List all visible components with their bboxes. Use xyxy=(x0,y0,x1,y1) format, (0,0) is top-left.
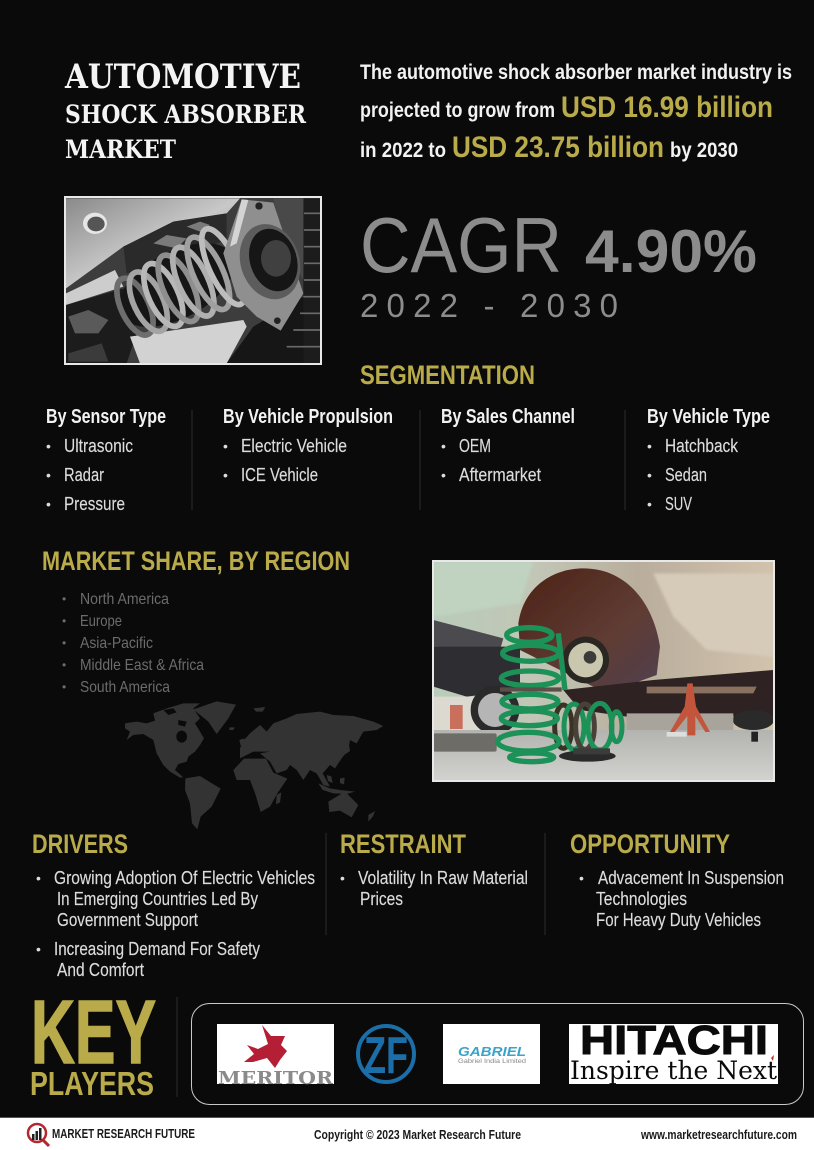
panel: opportunity: Technologies xyxy=(596,889,687,909)
CAGR: 4.90% xyxy=(585,218,757,285)
panel: restraint: Prices xyxy=(360,889,403,909)
logo: Hitachi xyxy=(569,1017,778,1085)
panel: key player logos xyxy=(192,1004,804,1104)
market summary text: projected to grow from xyxy=(360,99,555,122)
CAGR: CAGR xyxy=(360,201,562,289)
panel: opportunity: OPPORTUNITY xyxy=(570,829,730,859)
panel: by sensor type: Radar xyxy=(64,465,104,485)
market summary text: USD 23.75 billion xyxy=(452,131,664,164)
coil spring xyxy=(124,244,231,327)
market summary text xyxy=(360,61,792,164)
panel: by vehicle type xyxy=(647,406,770,514)
icon: market research future logo xyxy=(28,1124,49,1146)
panel: drivers xyxy=(32,829,315,980)
heading: key players: KEY xyxy=(31,983,156,1083)
wheel hub xyxy=(562,637,609,683)
logo: Gabriel: GABRIEL xyxy=(458,1044,526,1059)
panel: by vehicle type: By Vehicle Type xyxy=(647,406,770,428)
panel: by sensor type: Ultrasonic xyxy=(64,436,133,456)
region list: Middle East & Africa xyxy=(80,657,204,674)
panel: by sales channel: • xyxy=(441,438,446,454)
heading: market share by region: MARKET SHARE, BY REGION xyxy=(42,546,350,576)
logo: Hitachi: HITACHI xyxy=(580,1017,768,1063)
panel: opportunity: Advacement In Suspension xyxy=(598,868,784,888)
market summary text: USD 16.99 billion xyxy=(561,91,773,124)
region list: • xyxy=(62,614,66,628)
region list: North America xyxy=(80,591,169,608)
photo: shock absorber xyxy=(64,196,322,367)
region list xyxy=(62,591,204,696)
panel: by sales channel: Aftermarket xyxy=(459,465,541,485)
CAGR: 2022 - 2030 xyxy=(360,287,618,324)
region list: Asia-Pacific xyxy=(80,635,153,652)
region list: South America xyxy=(80,679,170,696)
logo: Meritor xyxy=(217,1024,334,1089)
panel: by vehicle propulsion: By Vehicle Propulsion xyxy=(223,406,393,428)
logo: Hitachi: Inspire the Next xyxy=(570,1056,777,1085)
world map xyxy=(125,701,383,829)
region list: Europe xyxy=(80,613,122,630)
panel: by vehicle propulsion: • xyxy=(223,467,228,483)
region list: • xyxy=(62,680,66,694)
panel: drivers: • xyxy=(36,941,41,957)
panel: by sales channel: OEM xyxy=(459,436,491,456)
panel: drivers: Government Support xyxy=(57,910,198,930)
panel: drivers: And Comfort xyxy=(57,960,144,980)
panel: restraint: Volatility In Raw Material xyxy=(358,868,528,888)
panel: by sales channel: By Sales Channel xyxy=(441,406,575,428)
jack stand xyxy=(670,683,710,735)
title xyxy=(64,57,306,164)
panel: by vehicle type: Hatchback xyxy=(665,436,739,456)
logo: Meritor: MERITOR xyxy=(218,1068,334,1089)
large spring xyxy=(498,628,565,762)
panel: by vehicle type: • xyxy=(647,496,652,512)
panel: by vehicle type: SUV xyxy=(665,494,692,514)
region list: • xyxy=(62,636,66,650)
panel: by sensor type: • xyxy=(46,438,51,454)
panel: by vehicle type: Sedan xyxy=(665,465,707,485)
panel: by sensor type: Pressure xyxy=(64,494,125,514)
panel: drivers: Growing Adoption Of Electric Vehicles xyxy=(54,868,315,888)
photo: car suspension springs xyxy=(432,560,775,783)
region list: • xyxy=(62,592,66,606)
footer xyxy=(0,1117,814,1150)
market summary text: in 2022 to xyxy=(360,139,446,162)
panel: by vehicle type: • xyxy=(647,467,652,483)
panel: drivers: In Emerging Countries Led By xyxy=(57,889,258,909)
footer: Copyright © 2023 Market Research Future xyxy=(314,1127,521,1142)
panel: by sensor type: By Sensor Type xyxy=(46,406,166,428)
title: AUTOMOTIVE xyxy=(64,57,301,97)
panel: by vehicle propulsion: Electric Vehicle xyxy=(241,436,347,456)
footer: MARKET RESEARCH FUTURE xyxy=(52,1126,195,1141)
panel: restraint: • xyxy=(340,870,345,886)
panel: drivers: DRIVERS xyxy=(32,829,128,859)
panel: drivers: • xyxy=(36,870,41,886)
heading: key players xyxy=(30,983,156,1102)
panel: opportunity: • xyxy=(579,870,584,886)
mounting plate xyxy=(223,199,303,331)
logo: ZF: ZF xyxy=(364,1027,408,1085)
panel: by vehicle propulsion xyxy=(223,406,393,485)
panel: opportunity: For Heavy Duty Vehicles xyxy=(596,910,761,930)
heading: key players: PLAYERS xyxy=(30,1065,154,1102)
panel: restraint: RESTRAINT xyxy=(340,829,466,859)
panel: by vehicle type: • xyxy=(647,438,652,454)
small spring xyxy=(555,703,622,750)
logo: Gabriel xyxy=(443,1024,540,1084)
CAGR xyxy=(360,201,757,324)
panel: by vehicle propulsion: • xyxy=(223,438,228,454)
title: MARKET xyxy=(65,135,176,164)
logo: Gabriel: Gabriel India Limited xyxy=(458,1058,526,1065)
panel: by sales channel xyxy=(441,406,575,485)
region list: • xyxy=(62,658,66,672)
panel: by sensor type: • xyxy=(46,496,51,512)
panel: opportunity xyxy=(570,829,784,930)
panel: by sales channel: • xyxy=(441,467,446,483)
panel: by sensor type xyxy=(46,406,166,514)
heading: segmentation: SEGMENTATION xyxy=(360,360,535,390)
panel: by sensor type: • xyxy=(46,467,51,483)
panel: drivers: Increasing Demand For Safety xyxy=(54,939,260,959)
panel: restraint xyxy=(340,829,528,909)
title: SHOCK ABSORBER xyxy=(65,100,306,129)
market summary text: by 2030 xyxy=(670,139,738,162)
panel: by vehicle propulsion: ICE Vehicle xyxy=(241,465,318,485)
